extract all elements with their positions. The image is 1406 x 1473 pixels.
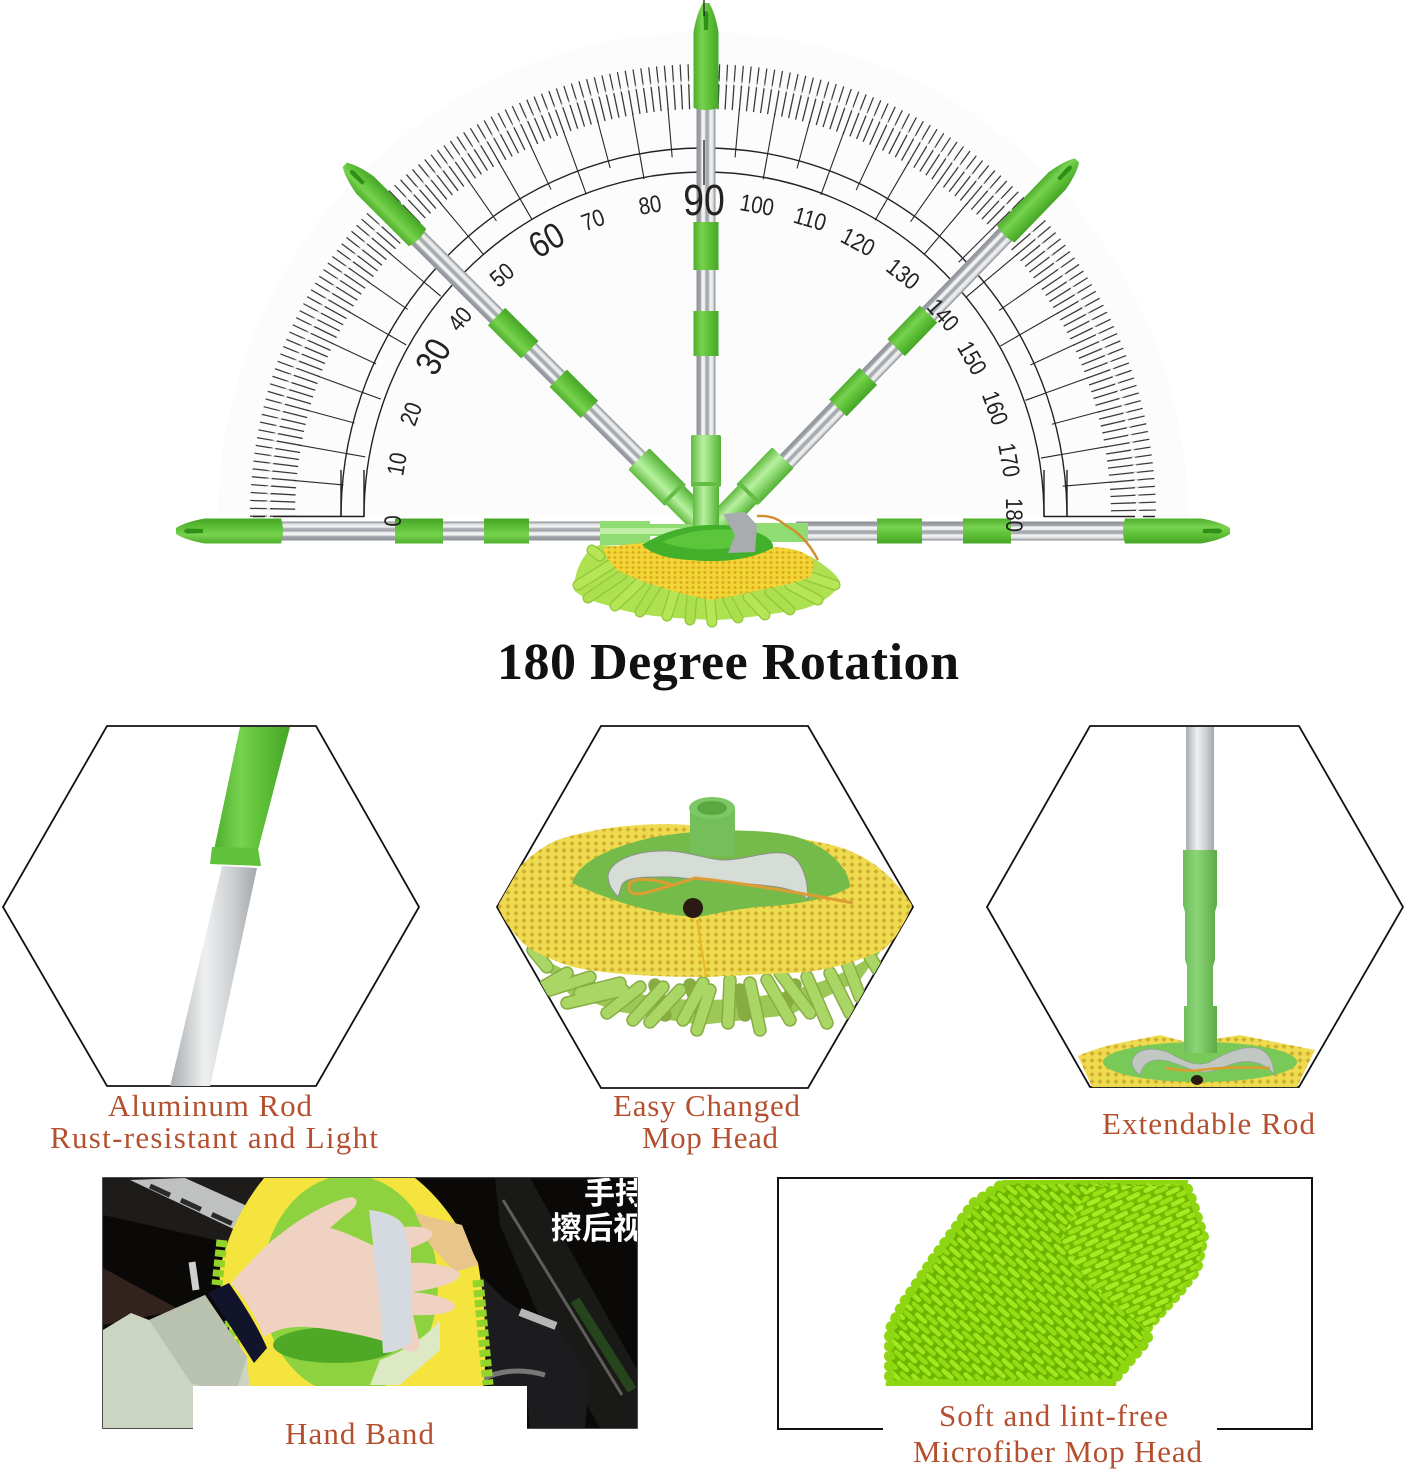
panel: microfiber mop head [778,1178,1312,1429]
hand strap [369,1210,411,1353]
caption: microfiber mop head: Soft and lint-free [939,1398,1168,1433]
angle labels: 60 [522,215,572,267]
angle labels: 30 [408,332,460,382]
angle labels: 160 [977,387,1013,429]
rod close-up [170,727,290,1087]
title: 180 Degree Rotation [497,634,959,691]
caption: extendable rod: Extendable Rod [1102,1106,1316,1141]
angle labels: 170 [993,441,1025,479]
mop head close-up [498,797,912,1030]
caption: aluminum rod: Aluminum Rod [108,1088,312,1123]
panel: aluminum rod [3,726,419,1087]
microfiber chenille [889,1180,1204,1384]
angle labels: 100 [738,189,776,221]
angle labels: 0 [380,515,406,527]
rod at 135 degrees [706,152,1086,536]
angle labels: 80 [636,190,664,220]
mop pad [219,1178,486,1390]
hand [231,1197,460,1352]
angle labels: 50 [485,257,519,293]
caption: microfiber mop head: Microfiber Mop Head [913,1434,1202,1469]
rod at 0 degrees [176,518,610,544]
extended rod close-up [1078,727,1315,1087]
caption: easy changed mop head: Easy Changed [613,1088,800,1123]
protractor [250,64,1156,518]
rod at 90 degrees [691,0,721,530]
photo background: car and mirror [103,1178,640,1428]
angle labels [380,175,1027,532]
angle labels: 150 [952,337,992,379]
angle labels: 70 [578,203,608,237]
angle labels: 40 [442,302,478,336]
angle labels: 10 [382,450,412,478]
rod at 180 degrees [796,518,1230,544]
angle labels: 110 [791,202,829,236]
caption: aluminum rod: Rust-resistant and Light [50,1120,378,1155]
angle labels: 90 [683,175,725,225]
rod at 45 degrees [336,156,717,537]
green disc [273,1327,397,1363]
angle labels: 20 [394,399,428,429]
sleeve [103,1295,250,1428]
angle labels: 140 [922,293,964,337]
angle labels: 130 [881,253,925,295]
cuff [208,1283,267,1363]
panel: easy changed mop head [497,726,913,1088]
angle labels: 120 [837,222,879,262]
mop head on rods [574,512,840,622]
panel: hand band photo [103,1175,675,1436]
caption: hand band: Hand Band [285,1416,434,1451]
panel: extendable rod [987,726,1403,1087]
caption: easy changed mop head: Mop Head [642,1120,778,1155]
overlay Chinese text: 手持 [584,1176,646,1211]
overlay Chinese text: 擦后视镜 [551,1211,675,1246]
angle labels: 180 [1001,498,1027,532]
